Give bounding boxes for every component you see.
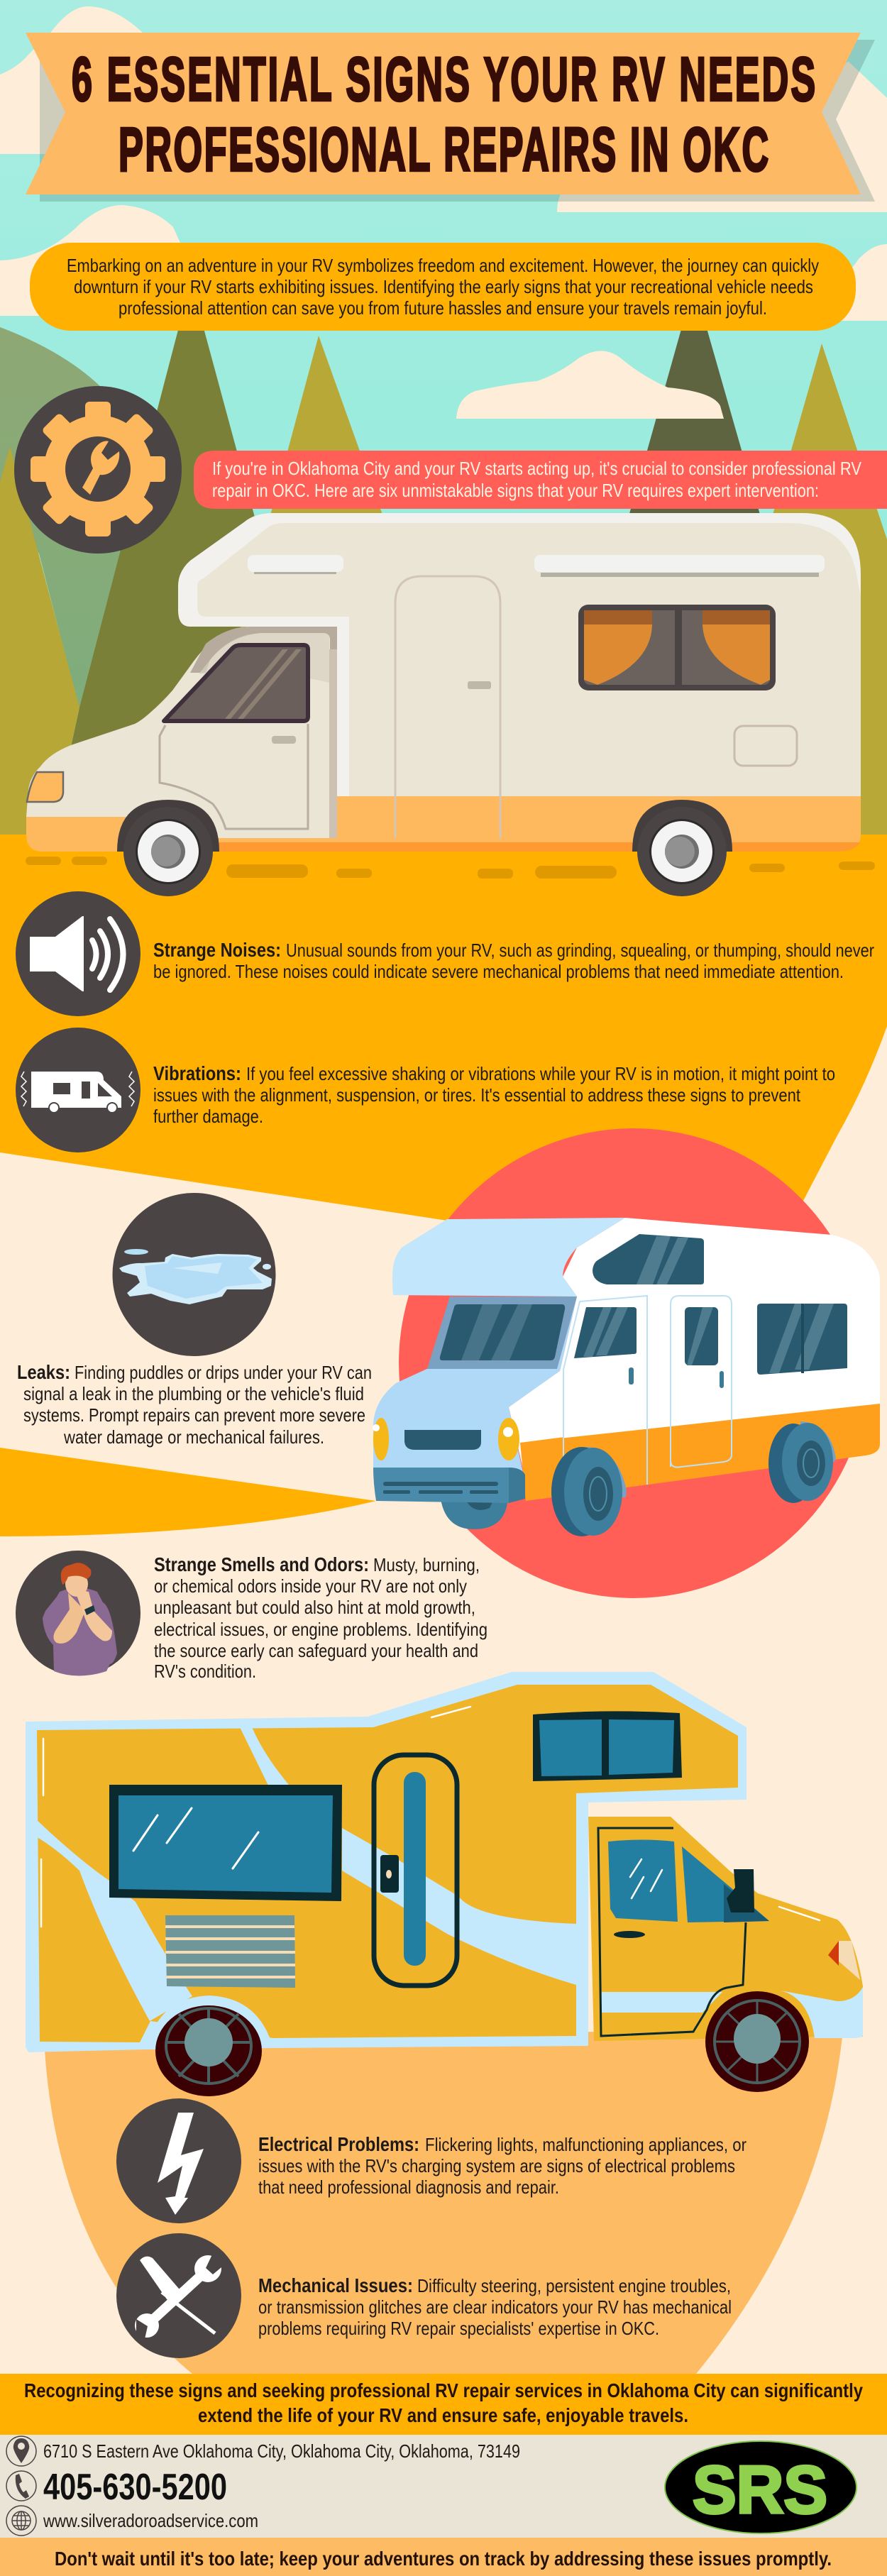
- window with curtains: [578, 605, 776, 690]
- text: mechanical issues: problems requiring RV repair specialists' expertise in OKC.: [258, 2318, 659, 2339]
- illustration: blue and white RV: [373, 1218, 880, 1536]
- text: mechanical issues: [258, 2274, 732, 2339]
- logo: SRS: [665, 2441, 856, 2533]
- blue outline: [26, 1672, 746, 2052]
- title text: [72, 45, 815, 185]
- illustration: yellow RV: [26, 1672, 863, 2096]
- tail light: [832, 1941, 860, 1980]
- icon: person covering nose: [16, 1551, 141, 1676]
- callout: Oklahoma City intro: [194, 451, 887, 509]
- upper window: [533, 1711, 682, 1781]
- footer band: [0, 2538, 887, 2576]
- intro callout: professional attention can save you from future hassles and ensure your travels remain joyful.: [119, 297, 767, 319]
- text: leaks: Leaks:: [17, 1361, 70, 1383]
- side windows: [574, 1234, 847, 1375]
- text: strange smells and odors: the source early can safeguard your health and: [154, 1640, 478, 1661]
- logo: SRS: SRS: [693, 2453, 827, 2528]
- door: [395, 576, 500, 838]
- cab: [373, 1297, 577, 1473]
- text: leaks: [17, 1361, 372, 1448]
- trees: forest: [0, 281, 887, 835]
- title banner: [26, 33, 875, 202]
- text: electrical problems: that need professional diagnosis and repair.: [258, 2176, 559, 2198]
- text: leaks: water damage or mechanical failures.: [63, 1426, 324, 1448]
- headlights: [373, 1418, 519, 1460]
- red circle backdrop: [399, 1128, 869, 1598]
- text: vibrations: Vibrations:: [153, 1062, 241, 1084]
- title text: PROFESSIONAL REPAIRS IN OKC: [119, 116, 768, 185]
- text: vibrations: [153, 1062, 835, 1127]
- text: strange smells and odors: Strange Smells and Odors:: [154, 1553, 369, 1575]
- wheels: [155, 1991, 809, 2096]
- panel: orange ground: [0, 835, 887, 1221]
- phone number: 405-630-5200: [43, 2467, 227, 2508]
- conclusion band: [0, 2374, 887, 2435]
- body: [37, 1685, 738, 2042]
- text: electrical problems: issues with the RV's charging system are signs of electrical problems: [258, 2155, 735, 2176]
- icon: wrench and screwdriver: [116, 2233, 241, 2358]
- vent: [165, 1915, 295, 1988]
- clouds: upper sky: [0, 6, 887, 321]
- website: www.silveradoroadservice.com: [43, 2510, 258, 2531]
- orange wedge: [0, 1448, 376, 1536]
- icon: phone: [6, 2471, 36, 2501]
- wheels: [117, 800, 732, 896]
- main window: [109, 1785, 342, 1901]
- contact panel: [0, 2435, 887, 2538]
- text: vibrations: further damage.: [153, 1106, 263, 1127]
- icon: globe: [6, 2506, 36, 2536]
- icon: gear with wrench: [14, 386, 182, 554]
- road dashes: [26, 857, 875, 879]
- panel: lower orange shape: [44, 2030, 843, 2374]
- text: mechanical issues: Mechanical Issues:: [258, 2274, 413, 2296]
- wheels behind body: [440, 1494, 508, 1529]
- swooshes: [35, 1727, 576, 2021]
- text: strange smells and odors: electrical issues, or engine problems. Identifying: [154, 1619, 487, 1640]
- text: electrical problems: Electrical Problems:: [258, 2133, 419, 2155]
- bumper: [373, 1468, 525, 1503]
- wheel arch: [147, 1996, 273, 2049]
- text: strange smells and odors: RV's condition.: [154, 1661, 256, 1682]
- icon: speaker: [16, 891, 141, 1016]
- text: leaks: systems. Prompt repairs can prevent more severe: [23, 1404, 365, 1426]
- intro callout: [30, 243, 856, 331]
- text: strange smells and odors: unpleasant but could also hint at mold growth,: [154, 1597, 475, 1618]
- grille: [404, 1430, 481, 1450]
- cab: [588, 1817, 863, 2041]
- orange lower band: [520, 1404, 880, 1501]
- text: strange smells and odors: [154, 1553, 487, 1682]
- lower body band: [26, 796, 861, 852]
- icon: location pin: [6, 2436, 36, 2466]
- windshield: [440, 1304, 565, 1360]
- conclusion band: extend the life of your RV and ensure safe, enjoyable travels.: [198, 2404, 688, 2426]
- wheels: [551, 1421, 836, 1536]
- text: mechanical issues: or transmission glitches are clear indicators your RV has mechanical: [258, 2296, 732, 2318]
- text: strange noises: Strange Noises:: [153, 939, 281, 961]
- text: leaks: signal a leak in the plumbing or the vehicle's fluid: [23, 1383, 364, 1404]
- text: electrical problems: Flickering lights, malfunctioning appliances, or: [425, 2134, 746, 2155]
- background: sky: [0, 0, 887, 835]
- cab body: [26, 627, 337, 838]
- green hill: [0, 327, 213, 710]
- icon: vibrating RV: [16, 1028, 141, 1152]
- cloud: centre: [456, 351, 724, 419]
- icon: water puddle: [112, 1193, 275, 1356]
- title text: 6 ESSENTIAL SIGNS YOUR RV NEEDS: [72, 45, 815, 114]
- text: mechanical issues: Difficulty steering, persistent engine troubles,: [417, 2275, 731, 2296]
- text: strange smells and odors: Musty, burning,: [373, 1554, 480, 1575]
- text: electrical problems: [258, 2133, 746, 2198]
- icon: lightning bolt: [116, 2098, 241, 2223]
- headlight: [27, 772, 63, 802]
- door outlines: [563, 1296, 732, 1487]
- text: strange smells and odors: or chemical odors inside your RV are not only: [154, 1575, 467, 1597]
- cab door and windshield: [160, 724, 308, 829]
- address: 6710 S Eastern Ave Oklahoma City, Oklahoma City, Oklahoma, 73149: [43, 2440, 520, 2462]
- text: strange noises: [153, 939, 874, 982]
- vents: [248, 555, 825, 577]
- text: leaks: Finding puddles or drips under your RV can: [75, 1362, 372, 1383]
- illustration: cream RV: [26, 513, 861, 896]
- door: [374, 1755, 457, 1986]
